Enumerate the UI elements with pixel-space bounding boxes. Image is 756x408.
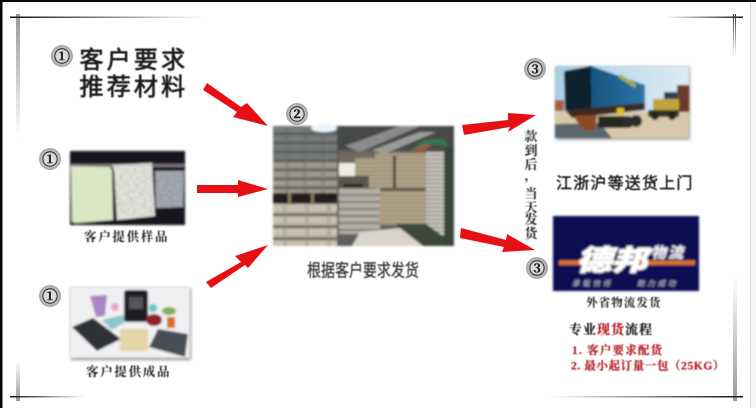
badge 3: logistics: ③	[529, 260, 545, 278]
step 1: 1. 客户要求配货	[572, 343, 664, 357]
badge 1: customer requirements: ①	[54, 48, 70, 66]
badge 1: samples	[39, 148, 61, 170]
badge 1: finished products	[39, 285, 61, 307]
logo panel: Deppon logistics: 承载信任	[572, 279, 613, 288]
logo panel: Deppon logistics	[553, 216, 699, 291]
vertical note: same-day shipping after payment	[524, 129, 539, 241]
process note	[569, 322, 725, 372]
photo: plastic pellet samples	[70, 151, 185, 225]
photo: plastic finished products	[70, 287, 191, 360]
badge 1: samples: ①	[42, 151, 58, 169]
vertical note: same-day shipping after payment: 当	[524, 186, 538, 201]
step 2: 2. 最小起订量一包（25KG）	[571, 358, 725, 372]
vertical note: same-day shipping after payment: 到	[524, 143, 538, 158]
logo panel: Deppon logistics: 德邦	[576, 245, 654, 276]
arrow: warehouse to delivery truck	[462, 113, 536, 135]
heading: customer requirements, recommended materials	[80, 47, 188, 101]
vertical note: same-day shipping after payment: ，	[524, 168, 538, 184]
arrow: products to warehouse	[206, 245, 268, 288]
arrow: warehouse to logistics	[460, 228, 535, 252]
badge 3: logistics	[526, 257, 548, 279]
vertical note: same-day shipping after payment: 天	[524, 200, 538, 215]
arrow: requirements to warehouse	[203, 83, 268, 126]
note heading: 专业现货流程	[569, 322, 653, 337]
vertical note: same-day shipping after payment: 发	[524, 212, 538, 227]
vertical note: same-day shipping after payment: 款	[524, 129, 538, 144]
label: door delivery in Jiangsu, Zhejiang, Shanghai: 江浙沪等送货上门	[556, 174, 694, 192]
heading: customer requirements, recommended materials: 推荐材料	[80, 74, 188, 101]
caption: customer finished products: 客户提供成品	[86, 364, 171, 379]
arrow: samples to warehouse	[197, 180, 268, 197]
badge 2: warehouse	[286, 103, 308, 125]
photo: container truck	[555, 66, 690, 140]
logo panel: Deppon logistics: 助力成功	[637, 279, 678, 288]
caption: customer samples: 客户提供样品	[84, 229, 169, 244]
caption: ship per customer requirements: 根据客户要求发货	[307, 261, 419, 281]
vertical note: same-day shipping after payment: 货	[524, 226, 539, 241]
vertical note: same-day shipping after payment: 后	[524, 157, 538, 172]
badge 2: warehouse: ②	[289, 106, 305, 124]
heading: customer requirements, recommended materials: 客户要求	[80, 47, 188, 74]
photo: warehouse stacked with bags	[273, 124, 454, 246]
badge 1: customer requirements	[51, 45, 73, 67]
caption: out-of-province logistics shipping: 外省物流发货	[586, 296, 662, 310]
badge 3: local delivery	[524, 58, 546, 80]
badge 3: local delivery: ③	[527, 61, 543, 79]
logo panel: Deppon logistics: 物流	[651, 245, 685, 262]
badge 1: finished products: ①	[42, 288, 58, 306]
